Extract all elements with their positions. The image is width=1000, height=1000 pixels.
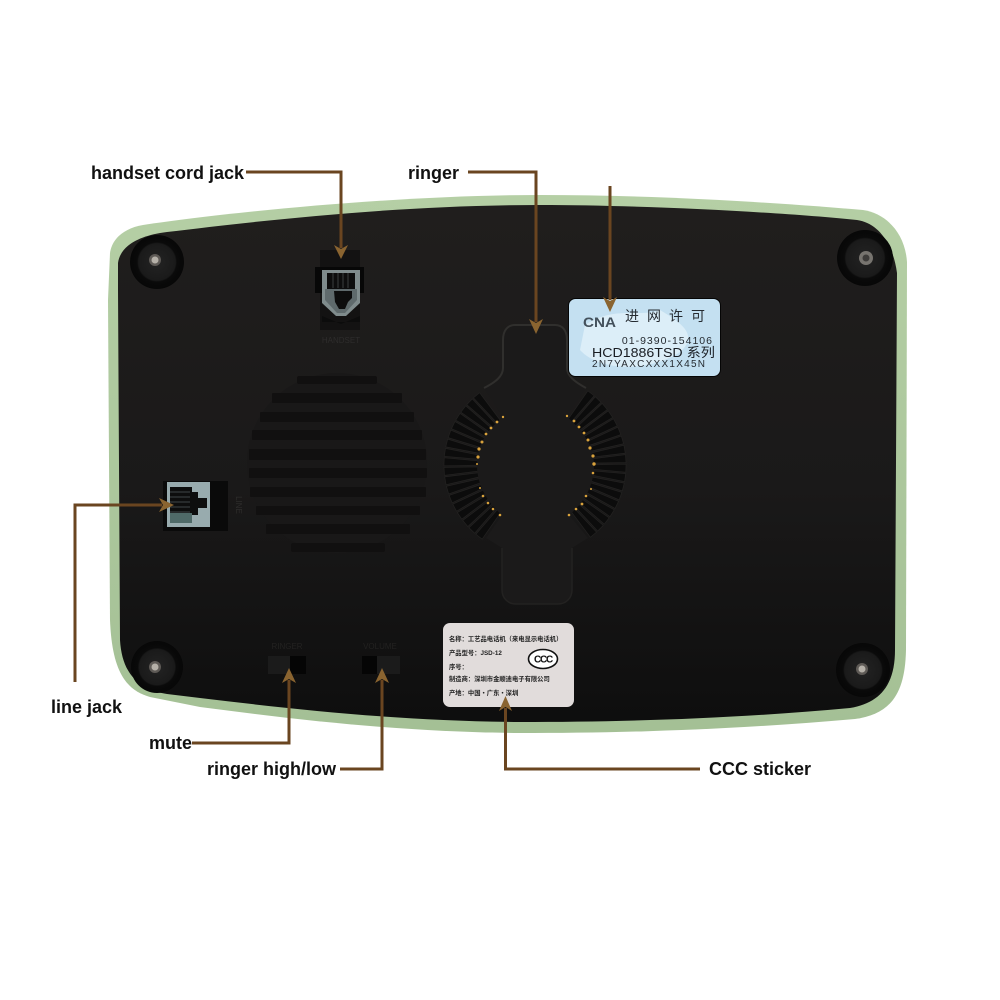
network license sticker: 01-9390-154106 [622,335,713,347]
CCC product sticker: 制造商：深圳市金顺迪电子有限公司 [449,674,550,683]
label: CCC sticker: CCC sticker [709,759,811,779]
arrow: mute [192,668,296,743]
label: line jack: line jack [51,697,123,717]
CCC product sticker [443,623,574,707]
arrow: CCC sticker [499,696,700,769]
foot: top left [130,235,184,289]
ringer high/low switch [362,642,400,674]
mute switch: RINGER [271,642,303,651]
network license sticker: 2N7YAXCXXX1X45N [592,359,705,370]
network license sticker: HCD1886TSD 系列 [592,345,715,360]
line jack socket [163,481,243,531]
CCC product sticker: 产品型号：JSD-12 [449,648,502,657]
icon: CCC mark: CCC [534,654,553,666]
foot: bottom left [131,641,183,693]
handset cord jack socket: HANDSET [322,336,360,345]
arrow: ringer high/low [340,668,389,769]
arrow: line jack [75,498,174,682]
CCC product sticker: 产地：中国・广东・深圳 [449,688,518,697]
arrow: handset cord jack [246,172,348,259]
network license sticker [568,298,720,376]
label: handset cord jack: handset cord jack [91,163,245,183]
arrow: network license sticker [603,186,617,312]
amber light dots [476,415,596,516]
phone base [108,195,907,733]
black back panel [118,205,897,722]
network license sticker: 进网许可 [625,308,713,324]
label: mute: mute [149,733,192,753]
CCC product sticker: 名称：工艺品电话机（来电显示电话机） [449,634,562,643]
foot: top right [837,230,893,286]
key-shaped ringer cover [477,325,594,604]
foot: bottom right [836,643,890,697]
handset cord jack socket [315,250,364,345]
mute switch [268,642,306,674]
CCC product sticker: 序号： [449,662,468,671]
label: ringer high/low: ringer high/low [207,759,337,779]
fan-shaped ringer vents [444,391,626,539]
network license sticker: CNA [583,314,616,330]
line jack socket: LINE [234,496,243,514]
speaker grille [247,373,427,553]
arrow: ringer [468,172,543,334]
label: ringer: ringer [408,163,459,183]
green outer shell [108,195,907,733]
ringer high/low switch: VOLUME [363,642,397,651]
